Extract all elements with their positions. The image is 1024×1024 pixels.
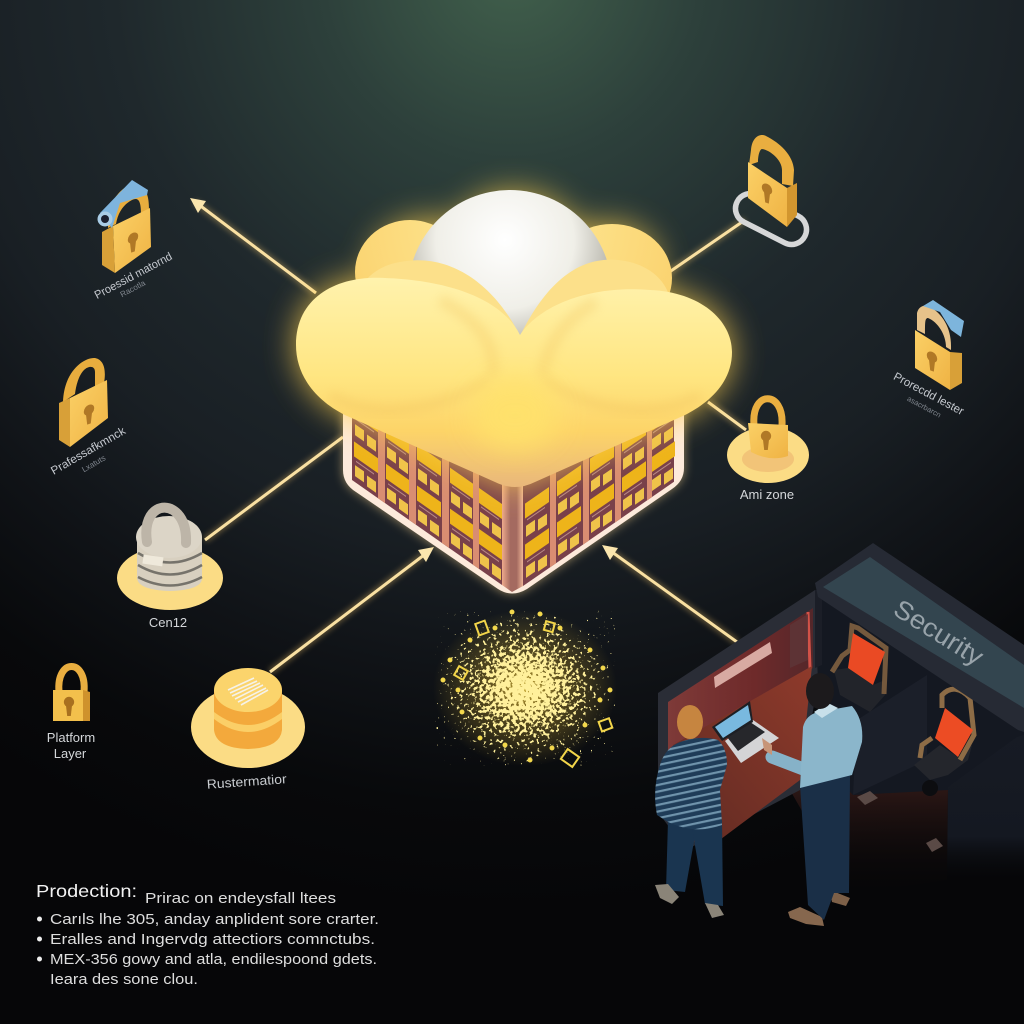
line: to Cen12 (205, 437, 343, 540)
blue cap (923, 300, 964, 337)
blue camera cap (98, 180, 148, 228)
line: to top-right lock (665, 220, 745, 275)
bullet 1: Carıls lhe 305, anday anplident sore crarter. (50, 911, 379, 928)
label: Rustermatior (206, 771, 288, 792)
lock: Prorecdd lester (891, 300, 966, 419)
back cloud lobes (355, 220, 672, 332)
sub-label: Lxatuts (80, 453, 107, 474)
central column (815, 590, 822, 668)
right server face (523, 378, 675, 586)
white dome (408, 190, 612, 394)
label: Ami zone (740, 487, 794, 502)
roof frame (815, 543, 1024, 732)
lock: Platform Layer (47, 666, 95, 761)
node: Rustermatior (191, 668, 305, 792)
label line 2: Layer (54, 746, 87, 761)
laptop (712, 701, 779, 763)
bullet 3: MEX-356 gowy and atla, endilespoond gdets. (50, 951, 377, 968)
lock: top right with ring (730, 135, 812, 250)
sign panel (823, 557, 1024, 708)
divider wall (853, 675, 927, 795)
label: Prafessafkmnck (49, 425, 128, 478)
floor tiles (857, 791, 943, 852)
particle burst (433, 610, 617, 767)
chair 2 (914, 689, 974, 796)
central cloud (296, 190, 732, 488)
arrow: from Rustermatior to platform (270, 547, 434, 672)
floor (790, 785, 948, 895)
production text block (36, 881, 379, 988)
ring base (730, 188, 812, 250)
label: Proessid matornd (93, 251, 174, 302)
security booth scene (655, 543, 1024, 926)
desk (668, 666, 812, 842)
node: Cen12 (117, 508, 223, 630)
bullet 3 continuation: Ieara des sone clou. (50, 971, 198, 988)
chair 1 (832, 626, 886, 712)
heading: Prodection: (36, 881, 137, 901)
node: Ami zone (727, 399, 809, 502)
line: to Ami zone (708, 402, 746, 430)
central platform: data centre box (343, 377, 684, 594)
label: Prorecdd lester (891, 371, 966, 418)
booth back interior (818, 593, 1024, 800)
lock: Proessid matornd (93, 180, 174, 302)
sign text: Security (888, 593, 989, 672)
front cloud body (296, 278, 732, 487)
bullet 2: Eralles and Ingervdg attectiors comnctubs. (50, 931, 375, 948)
sub-label: Racotla (119, 278, 147, 299)
person: right, blue shirt (762, 673, 862, 926)
centre corner pillar (502, 470, 523, 592)
left server face (352, 377, 503, 586)
red window (668, 608, 813, 772)
lock: Prafessafkmnck (49, 358, 128, 478)
cloud shading (330, 300, 700, 451)
subheading: Prirac on endeysfall ltees (145, 890, 336, 907)
sub-label: asacrbarcn (906, 394, 943, 419)
label: Platform (47, 730, 95, 745)
front end wall (947, 735, 1024, 880)
person: left, striped shirt (655, 705, 727, 918)
connector arrows (190, 198, 746, 672)
arrow: from security booth to platform (602, 545, 737, 642)
window light strip (714, 642, 772, 688)
label: Cen12 (149, 615, 187, 630)
left wall frame (658, 590, 818, 850)
arrow: up-left to protected lock (190, 198, 316, 293)
inner fold lobes (355, 260, 520, 400)
paper stack (228, 678, 268, 705)
